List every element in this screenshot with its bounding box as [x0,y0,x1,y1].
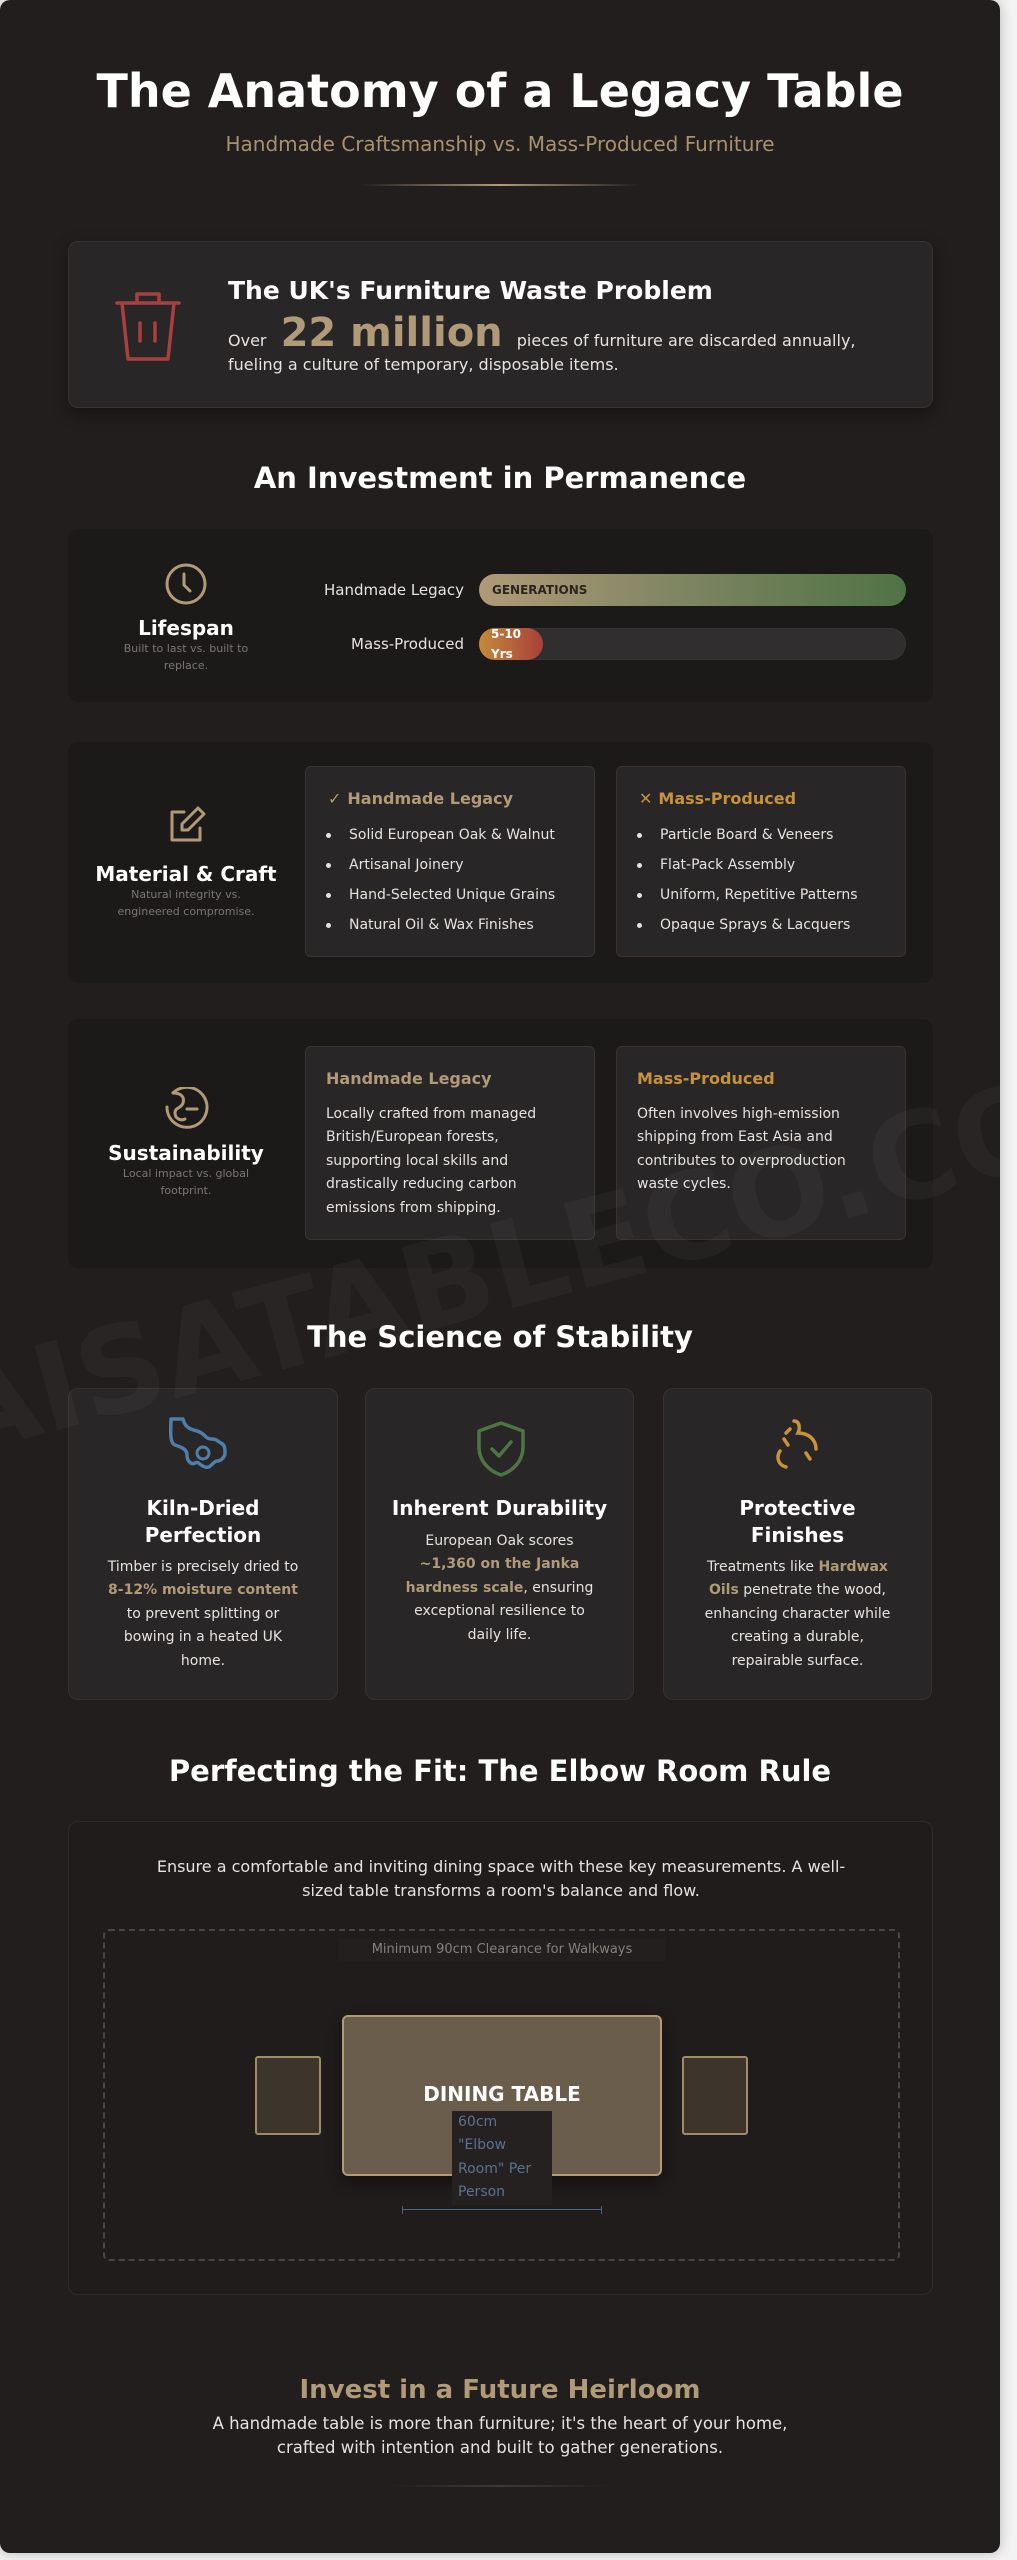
heading: stability: The Science of Stability [307,1320,693,1354]
card: finishes: Treatments like Hardwax Oils penetrate the wood, enhancing character while creating a durable, repairable surface. [705,1559,890,1669]
card: handmade materials: Hand-Selected Unique Grains [349,887,555,903]
label: clearance [339,1939,665,1961]
title: The Anatomy of a Legacy Table [96,64,904,118]
table: DINING TABLE [423,2082,581,2106]
bar chart: lifespan: Handmade Legacy [324,581,464,599]
heading: waste: The UK's Furniture Waste Problem [228,276,713,305]
card: mass-produced materials: Uniform, Repetitive Patterns [660,887,858,903]
icon: clock [166,564,206,604]
footer text: A handmade table is more than furniture; it's the heart of your home, crafted with intention and built to gather generations. [213,2414,787,2457]
card: durability: Inherent Durability [392,1496,607,1520]
panel: sustainability [68,1019,933,1268]
card: kiln-dried: Timber is precisely dried to 8-12% moisture content to prevent splitting or bowing in a heated UK home. [108,1559,298,1669]
label: clearance: Minimum 90cm Clearance for Walkways [372,1942,632,1957]
panel: material & craft [68,742,933,983]
card: mass-produced sustainability: Mass-Produced [637,1069,775,1088]
card: handmade sustainability: Handmade Legacy [326,1069,492,1088]
footer divider [390,2485,610,2487]
icon: edit [170,806,206,842]
label: 60cm [452,2111,552,2205]
label: lifespan: Built to last vs. built to replace. [124,642,248,672]
icon: oil drop [776,1419,818,1469]
text: intro: Ensure a comfortable and inviting dining space with these key measurements. A well-sized table transforms a room's balance and flow. [157,1857,845,1900]
heading: elbow room: Perfecting the Fit: The Elbow Room Rule [169,1754,831,1788]
bar chart: lifespan: Mass-Produced [351,635,464,653]
card: handmade sustainability: Locally crafted from managed British/European forests, supporting local skills and drastically reducing carbon emissions from shipping. [326,1106,536,1216]
card: handmade materials: Artisanal Joinery [349,857,464,873]
header divider [360,184,640,186]
chair right [682,2056,748,2135]
label: sustainability: Sustainability [108,1141,264,1165]
card: finishes: Protective Finishes [739,1496,856,1547]
panel: waste problem [68,241,933,408]
label: lifespan [124,564,248,672]
bar chart: lifespan: GENERATIONS [492,583,587,597]
card: mass-produced sustainability: Often involves high-emission shipping from East Asia and contributes to overproduction waste cycles. [637,1106,846,1192]
card: mass-produced sustainability [616,1046,906,1240]
bar chart: lifespan: 5-10 Yrs [491,627,521,661]
card: kiln-dried [68,1388,338,1700]
label: material: Material & Craft [95,862,277,886]
footer heading: Invest in a Future Heirloom [299,2375,701,2405]
icon: wood blob [168,1417,227,1470]
label: lifespan: Lifespan [138,616,234,640]
label: sustainability [108,1087,264,1197]
card: handmade materials: Natural Oil & Wax Finishes [349,917,534,933]
icon: globe [166,1087,208,1129]
measure line [402,2206,602,2214]
card: mass-produced materials: ✕ Mass-Produced [639,789,796,808]
card: mass-produced materials: Particle Board & Veneers [660,827,833,843]
label: sustainability: Local impact vs. global footprint. [123,1167,249,1197]
card: durability [365,1388,634,1700]
label: material [95,806,277,918]
card: durability: European Oak scores ~1,360 on the Janka hardness scale, ensuring exceptional resilience to daily life. [406,1533,593,1643]
heading: permanence: An Investment in Permanence [254,461,746,495]
card: mass-produced materials: Opaque Sprays & Lacquers [660,917,850,933]
card: handmade materials: Solid European Oak & Walnut [349,827,555,843]
label: 60cm: 60cm "Elbow Room" Per Person [458,2114,531,2200]
card: mass-produced materials: Flat-Pack Assembly [660,857,795,873]
text: 22 million stat: Over 22 million pieces of furniture are discarded annually, [228,310,856,356]
diagram: room layout [103,1929,900,2261]
icon: shield check [477,1421,525,1477]
label: material: Natural integrity vs. engineered compromise. [117,888,255,918]
table [342,2015,662,2176]
icon: trash [115,292,181,361]
panel: waste problem: fueling a culture of temporary, disposable items. [228,355,619,374]
card: handmade materials [305,766,595,957]
card: mass-produced materials [616,766,906,957]
card: finishes [663,1388,932,1700]
bar chart: lifespan [324,574,906,661]
card: kiln-dried: Kiln-Dried Perfection [145,1496,261,1547]
subtitle: Handmade Craftsmanship vs. Mass-Produced Furniture [225,132,775,156]
panel: elbow room [68,1821,933,2295]
card: handmade materials: ✓ Handmade Legacy [328,789,513,808]
chair left [255,2056,321,2135]
panel: lifespan [68,529,933,702]
card: handmade sustainability [305,1046,595,1240]
